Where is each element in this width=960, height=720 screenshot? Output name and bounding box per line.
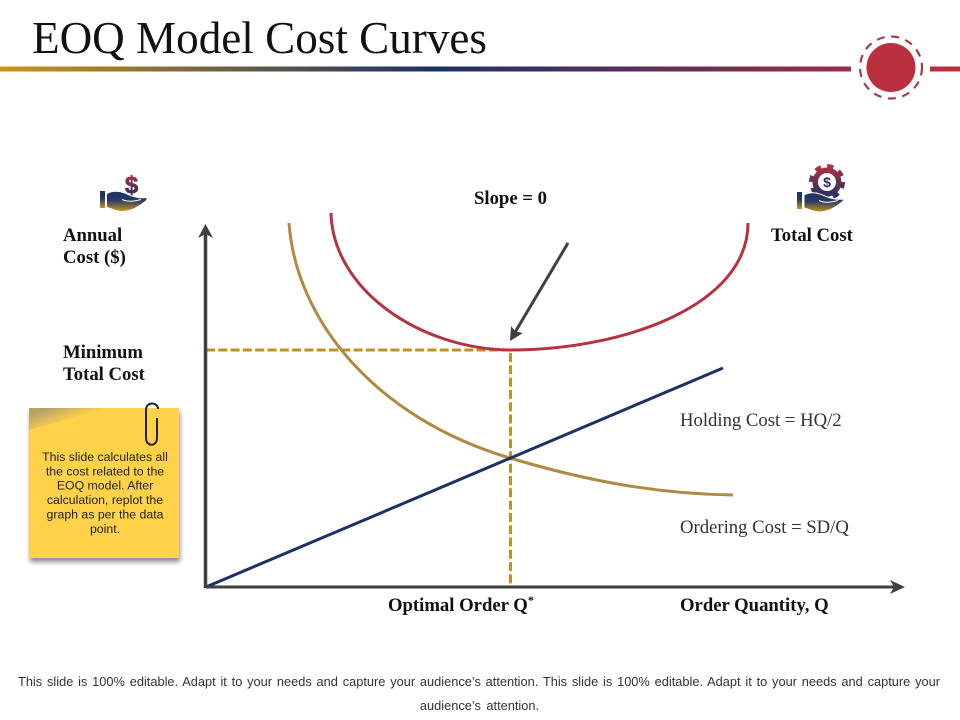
note text: the cost related to the [46,464,164,478]
label: minimum total cost: Total Cost [63,364,146,385]
header badge [860,36,922,98]
label: ordering cost: Ordering Cost = SD/Q [680,517,849,538]
x axis [206,580,905,594]
footer text: This slide is 100% editable. Adapt it to your needs and capture your audience’s attention. This slide is 100% editable. Adapt it to your needs and capture your [18,674,940,689]
label: annual cost: Annual [63,225,122,246]
curve: ordering cost [289,223,733,495]
label: holding cost: Holding Cost = HQ/2 [680,410,842,431]
chart: EOQ cost curves [198,213,905,594]
header rule [0,66,960,72]
icon: hand with dollar [100,172,146,211]
curve: total cost [331,213,748,350]
dashed guide lines [206,350,510,587]
title: EOQ Model Cost Curves [32,12,487,63]
icon: paperclip [146,404,158,445]
label: total cost: Total Cost [771,225,854,246]
note text: graph as per the data [47,508,164,522]
label: optimal order: Optimal Order Q [388,595,528,616]
note text: EOQ model. After [57,478,153,492]
y axis [198,224,213,588]
label: optimal order: * [528,593,534,607]
label: slope: Slope = 0 [474,188,547,209]
label: order quantity: Order Quantity, Q [680,595,829,616]
label: minimum total cost: Minimum [63,342,143,363]
line: holding cost [206,368,723,587]
icon: hand with gear and dollar: $ [823,174,831,190]
note text: This slide calculates all [42,450,168,464]
sticky note [29,404,179,558]
note text: calculation, replot the [47,493,163,507]
footer text: audience’s attention. [420,698,539,713]
arrow: slope pointer [510,243,568,341]
label: annual cost: Cost ($) [63,247,126,268]
icon: hand with dollar: $ [125,172,139,199]
note text: point. [90,522,120,536]
icon: hand with gear and dollar [797,166,844,212]
